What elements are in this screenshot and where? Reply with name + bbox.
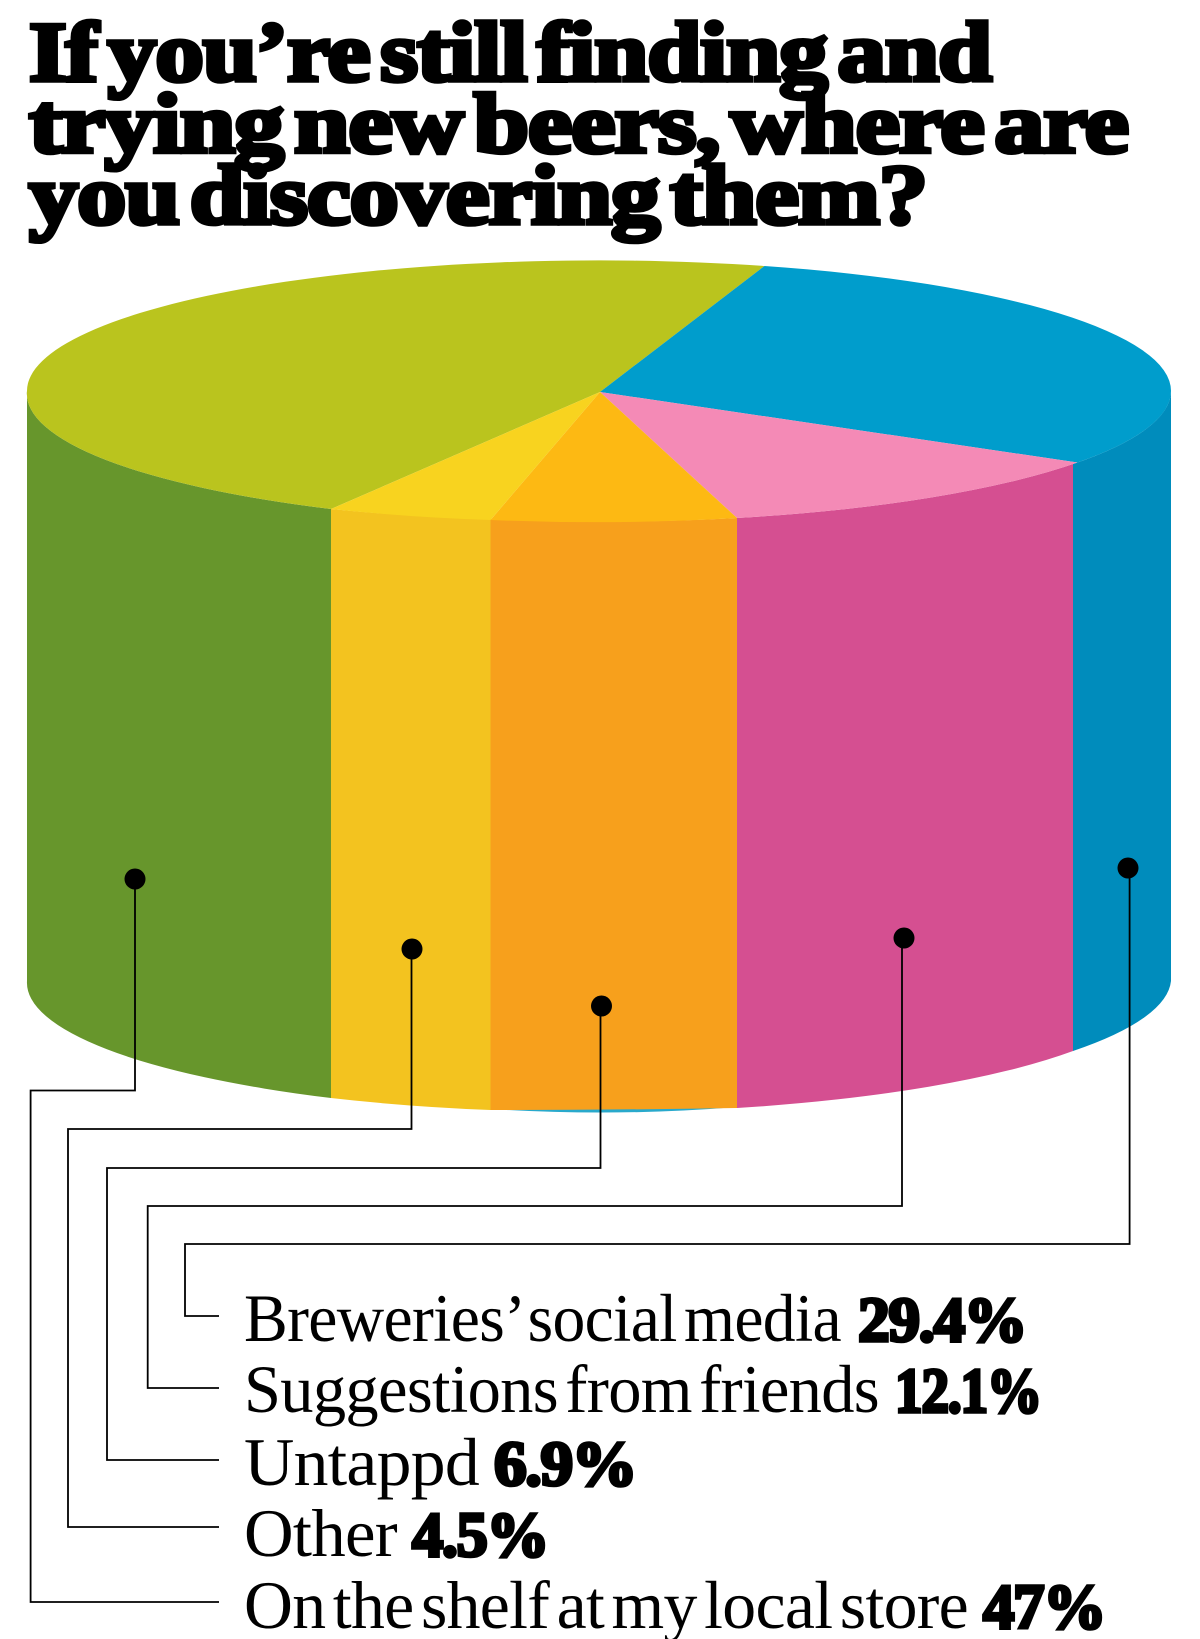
leader: untappd (107, 996, 612, 1460)
side: other (yellow) (331, 509, 490, 1110)
label: untappd: Untappd (244, 1424, 480, 1500)
title: If you’re still finding and (29, 6, 992, 100)
top: untappd (orange) (490, 392, 737, 522)
bottom sliver (blue) (490, 1107, 737, 1113)
top: breweries' social media (blue) (600, 266, 1171, 462)
top: on the shelf (lime) (27, 260, 764, 509)
leader: on the shelf (31, 868, 219, 1602)
top: other (yellow) (331, 392, 600, 520)
leader: breweries' social media (185, 858, 1138, 1316)
label: other (244, 1495, 548, 1571)
title (29, 6, 1128, 242)
title: trying new beers, where are (29, 77, 1128, 171)
label: other: 4.5% (412, 1500, 548, 1570)
label: breweries' social media: 29.4% (858, 1285, 1026, 1355)
leader: other (68, 938, 422, 1527)
side: suggestions from friends (pink) (737, 462, 1078, 1108)
label: suggestions from friends: 12.1% (895, 1356, 1041, 1426)
label: breweries' social media: Breweries’ social media (244, 1280, 841, 1356)
side: untappd (orange) (490, 518, 737, 1110)
title: you discovering them? (29, 148, 927, 242)
label: untappd: 6.9% (494, 1429, 636, 1499)
side: on the shelf at my local store (green) (27, 391, 331, 1098)
3D pie chart (27, 260, 1171, 1113)
top: suggestions from friends (pink) (600, 392, 1078, 518)
leader: suggestions from friends (148, 928, 914, 1388)
side: breweries' social media (blue) (1073, 391, 1171, 1051)
label: other: Other (244, 1495, 398, 1571)
label: suggestions from friends: Suggestions from friends (244, 1351, 879, 1427)
label: untappd (244, 1424, 636, 1500)
